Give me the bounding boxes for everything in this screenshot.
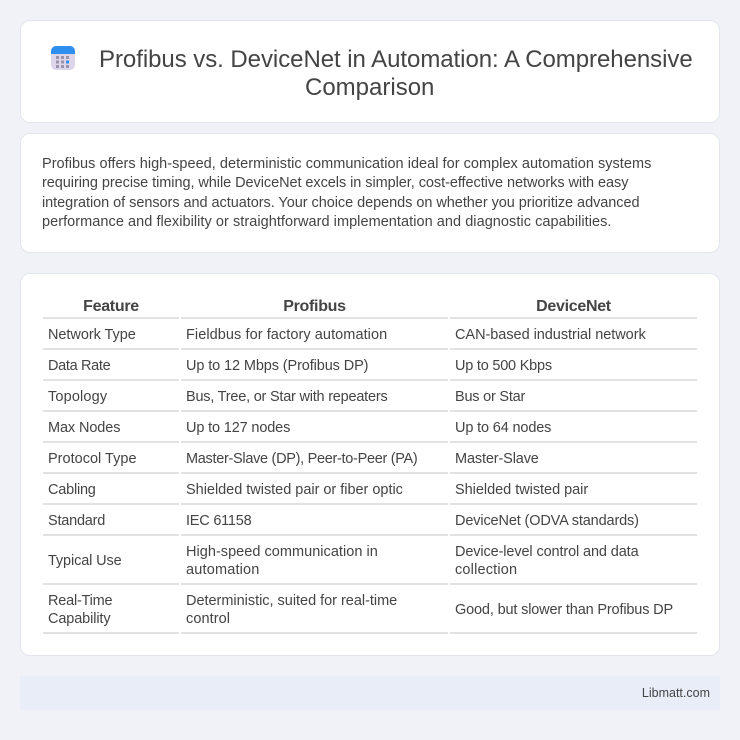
row lines and cells: Device-level control and data — [455, 544, 639, 560]
row lines and cells: CAN-based industrial network — [455, 327, 646, 343]
footer bar — [20, 676, 720, 710]
row lines and cells: Topology — [48, 389, 107, 405]
row lines and cells: Typical Use — [48, 553, 122, 569]
row lines and cells: Bus, Tree, or Star with repeaters — [186, 389, 387, 405]
row lines and cells: High-speed communication in — [186, 544, 378, 560]
summary text: requiring precise timing, while DeviceNet excels in simpler, cost-effective networks with easy — [42, 175, 628, 191]
row lines and cells: IEC 61158 — [186, 513, 251, 529]
row lines and cells — [43, 317, 697, 634]
title: Profibus vs. DeviceNet in Automation: A Comprehensive — [99, 46, 693, 73]
column headers: Profibus — [283, 298, 346, 315]
row lines and cells: Deterministic, suited for real-time — [186, 593, 397, 609]
panel: summary card — [20, 133, 720, 253]
summary text — [42, 156, 651, 230]
row lines and cells: Cabling — [48, 482, 96, 498]
row lines and cells: Up to 127 nodes — [186, 420, 290, 436]
row lines and cells: Capability — [48, 611, 110, 627]
row lines and cells: Up to 12 Mbps (Profibus DP) — [186, 358, 368, 374]
title — [99, 46, 693, 101]
summary text: integration of sensors and actuators. Your choice depends on whether you prioritize advanced — [42, 195, 640, 211]
row lines and cells: Network Type — [48, 327, 136, 343]
row lines and cells: Master-Slave (DP), Peer-to-Peer (PA) — [186, 451, 417, 467]
row lines and cells: Shielded twisted pair — [455, 482, 588, 498]
row lines and cells: Bus or Star — [455, 389, 525, 405]
row lines and cells: Standard — [48, 513, 105, 529]
footer credit: Libmatt.com — [642, 686, 710, 700]
row lines and cells: Up to 64 nodes — [455, 420, 551, 436]
summary text: Profibus offers high-speed, deterministic communication ideal for complex automation systems — [42, 156, 651, 172]
column headers: DeviceNet — [536, 298, 611, 315]
row lines and cells: collection — [455, 562, 517, 578]
table: comparison — [43, 298, 697, 634]
column headers — [83, 298, 611, 315]
row lines and cells: control — [186, 611, 230, 627]
row lines and cells: Up to 500 Kbps — [455, 358, 552, 374]
panel: title card — [20, 20, 720, 123]
column headers: Feature — [83, 298, 139, 315]
row lines and cells: Good, but slower than Profibus DP — [455, 602, 673, 618]
row lines and cells: automation — [186, 562, 260, 578]
row lines and cells: Fieldbus for factory automation — [186, 327, 387, 343]
row lines and cells: Protocol Type — [48, 451, 137, 467]
row lines and cells: Max Nodes — [48, 420, 120, 436]
panel: comparison table — [20, 273, 720, 656]
row lines and cells: DeviceNet (ODVA standards) — [455, 513, 639, 529]
row lines and cells: Master-Slave — [455, 451, 539, 467]
row lines and cells: Real-Time — [48, 593, 112, 609]
icon: calendar — [51, 46, 75, 70]
summary text: performance and flexibility or straightforward implementation and diagnostic capabilities. — [42, 214, 611, 230]
row lines and cells: Data Rate — [48, 358, 110, 374]
title: Comparison — [305, 74, 434, 101]
row lines and cells: Shielded twisted pair or fiber optic — [186, 482, 403, 498]
